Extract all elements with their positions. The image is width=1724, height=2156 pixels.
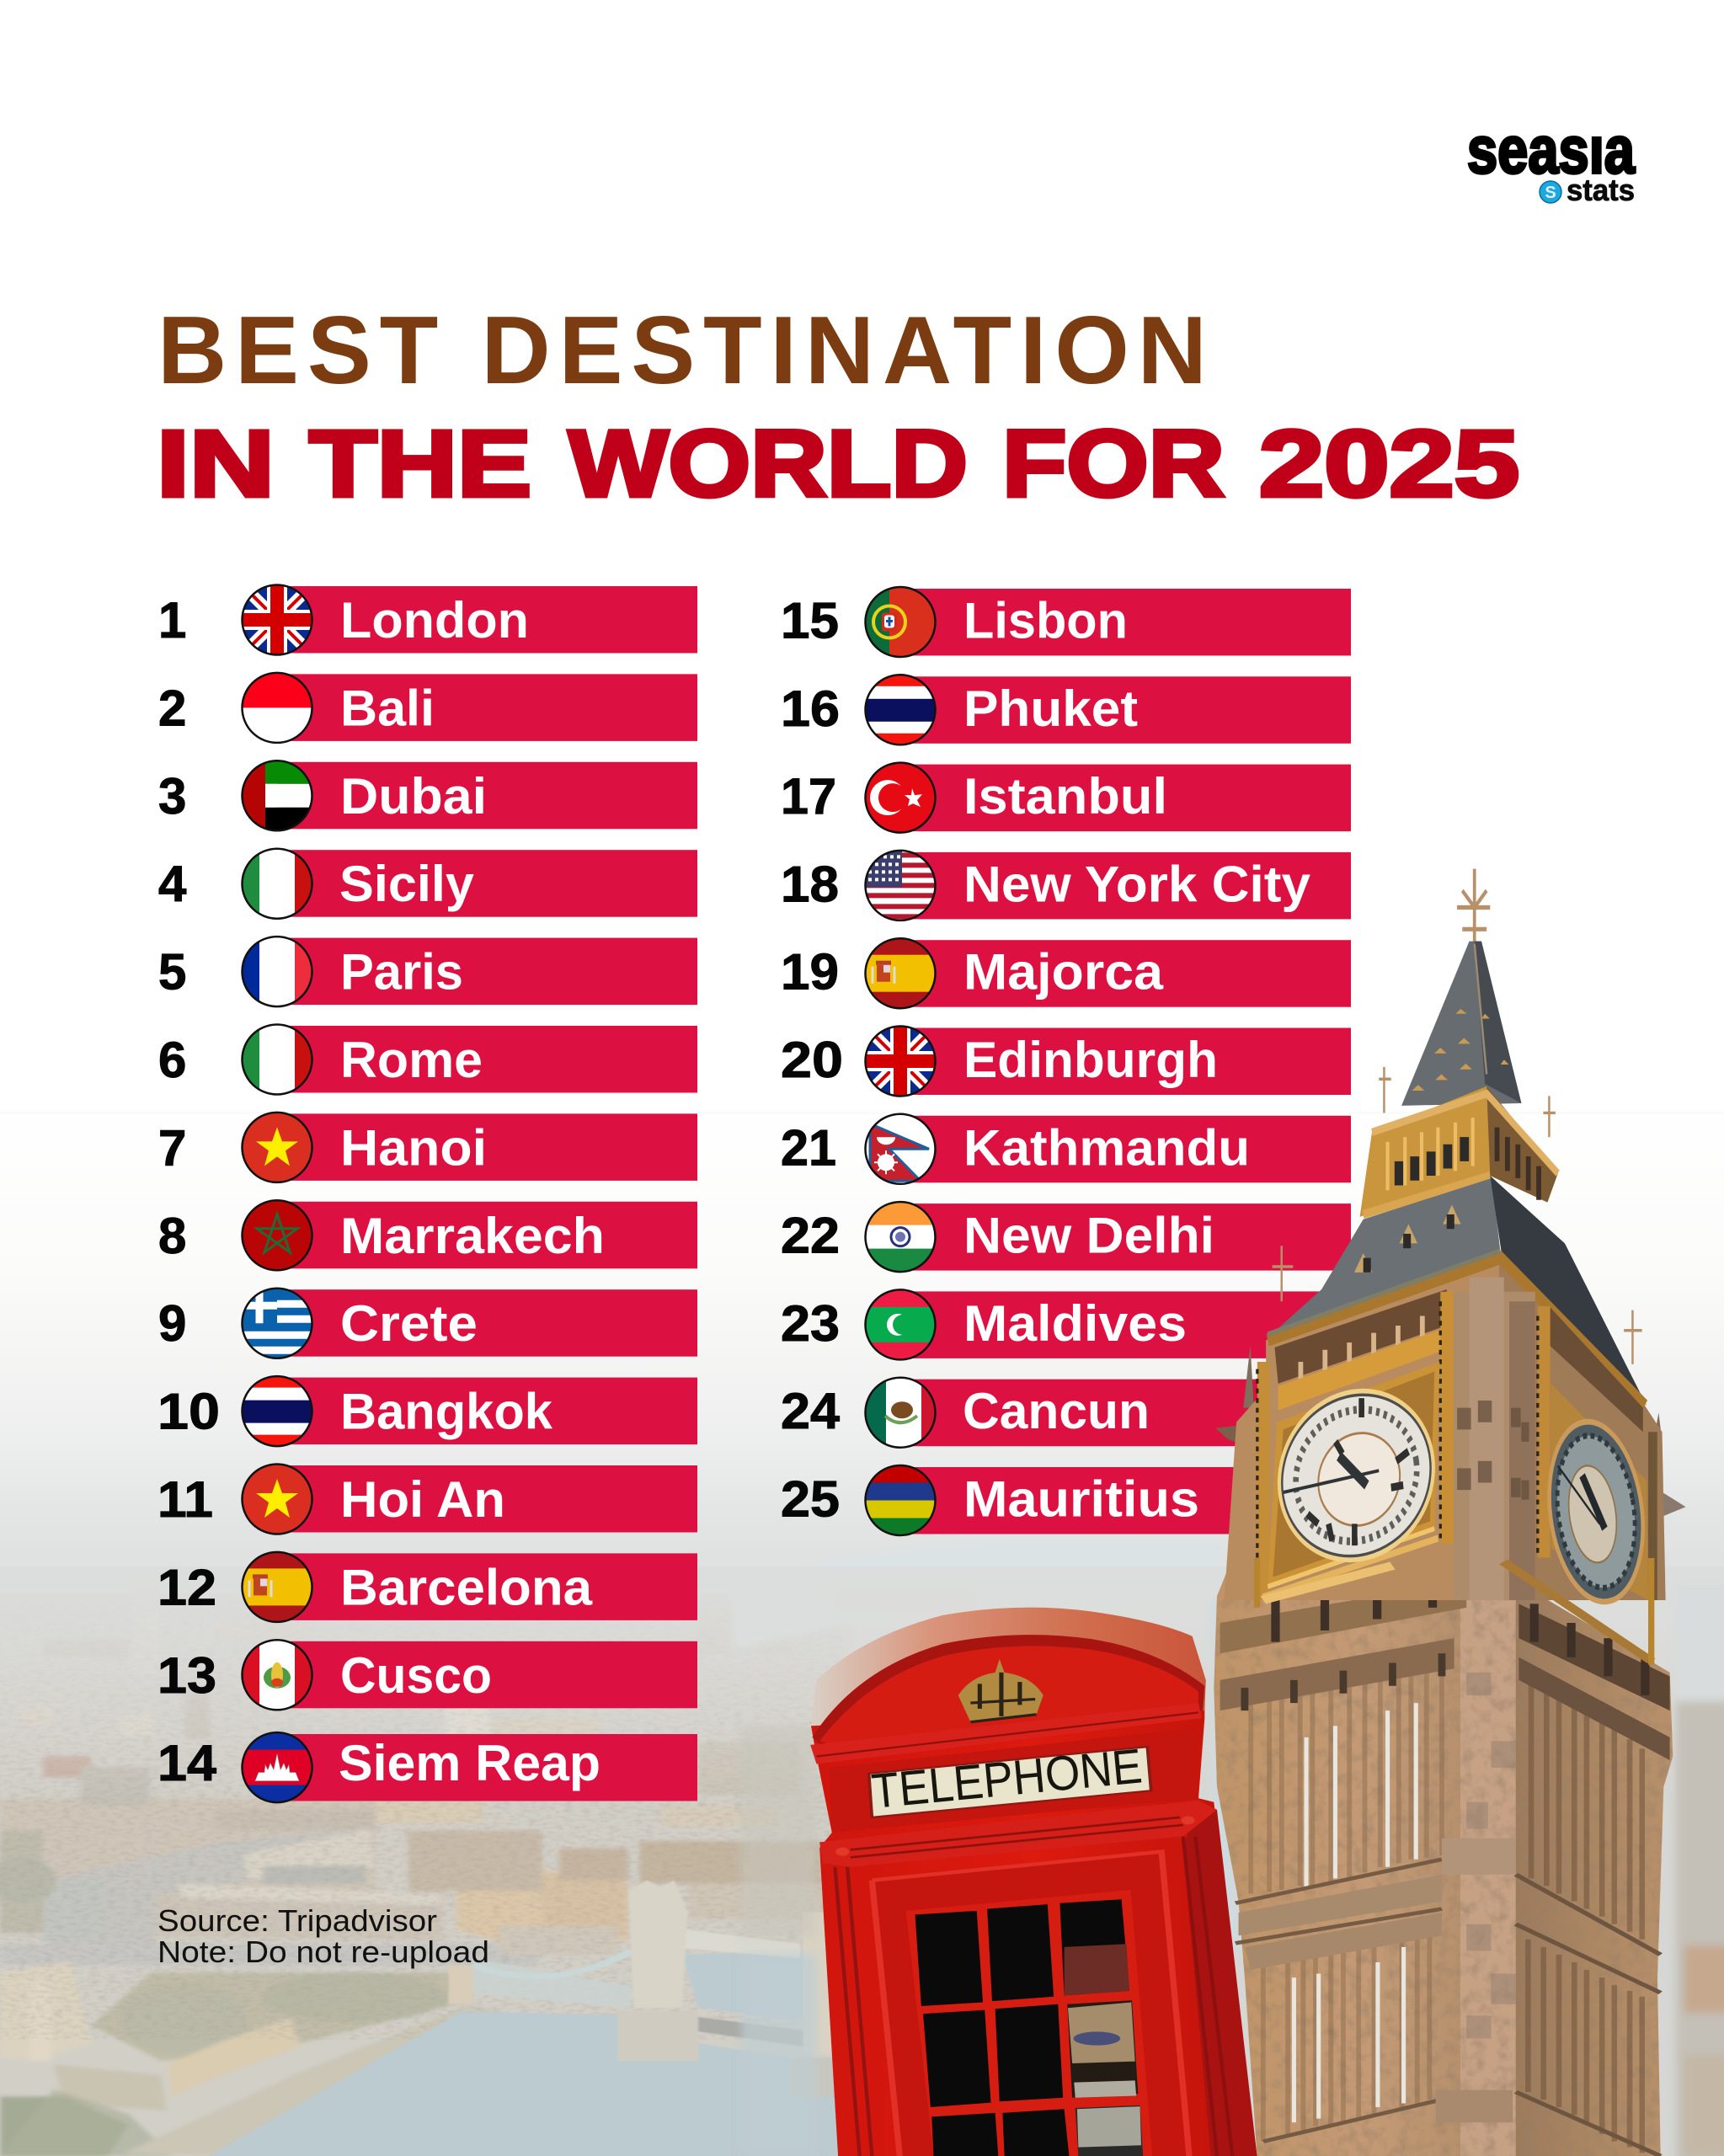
left clock: [1268, 1372, 1445, 1579]
distant river, upper area: [733, 1541, 1221, 1651]
title: BEST DESTINATION: [157, 297, 1207, 404]
row 23 Maldives: 23: [781, 1295, 840, 1352]
row 13 Cusco: Cusco: [340, 1647, 492, 1704]
row 12 Barcelona: Barcelona: [340, 1559, 593, 1615]
entablature: [819, 1801, 1217, 1867]
row 5 Paris: [158, 937, 697, 1007]
logo: seasia stats: [1467, 101, 1636, 207]
row 21 Kathmandu: 21: [781, 1119, 836, 1176]
row 18 New York City: 18: [781, 856, 839, 912]
right clock: [1534, 1404, 1658, 1619]
row 24 Cancun: 24: [781, 1383, 841, 1439]
sign housing: [829, 1727, 1197, 1833]
row 17 Istanbul: 17: [781, 768, 836, 825]
row 4 Sicily: Sicily: [339, 856, 475, 912]
row 25 Mauritius: 25: [781, 1470, 840, 1528]
row 2 Bali: Bali: [340, 680, 435, 736]
row 14 Siem Reap: [157, 1732, 697, 1803]
row 18 New York City: [781, 850, 1351, 921]
logo: seasia stats: seasia: [1467, 112, 1636, 187]
row 10 Bangkok: 10: [157, 1384, 220, 1440]
title line two: [157, 411, 1519, 516]
row 1 London: London: [340, 592, 529, 648]
row 17 Istanbul: [781, 762, 1351, 833]
row 2 Bali: [158, 672, 697, 743]
row 14 Siem Reap: 14: [157, 1735, 217, 1791]
cornice: [810, 1703, 1202, 1764]
row 17 Istanbul: Istanbul: [963, 768, 1167, 825]
row 5 Paris: 5: [158, 944, 186, 1001]
row 19 Majorca: [781, 938, 1351, 1009]
row 2 Bali: 2: [158, 680, 186, 736]
clock hands: [1284, 1470, 1379, 1492]
row 6 Rome: [158, 1024, 697, 1095]
dome roof: [810, 1608, 1206, 1726]
left clock frame: [1268, 1362, 1439, 1587]
row 16 Phuket: [781, 675, 1351, 745]
title line two: THE: [309, 411, 531, 516]
row 3 Dubai: Dubai: [340, 768, 487, 825]
row 15 Lisbon: Lisbon: [963, 593, 1128, 648]
row 7 Hanoi: 7: [158, 1119, 186, 1176]
row 13 Cusco: 13: [157, 1647, 216, 1704]
body: [810, 1680, 1257, 2156]
row 24 Cancun: Cancun: [963, 1383, 1150, 1439]
row 20 Edinburgh: 20: [781, 1032, 843, 1088]
row 3 Dubai: 3: [158, 768, 186, 825]
row 22 New Delhi: New Delhi: [963, 1208, 1214, 1264]
source note: Note: Do not re-upload: [157, 1935, 489, 1969]
title line two: IN: [157, 411, 275, 516]
row 22 New Delhi: [781, 1202, 1351, 1273]
row 1 London: [158, 584, 697, 655]
row 16 Phuket: 16: [781, 680, 840, 737]
row 12 Barcelona: 12: [157, 1559, 216, 1615]
right arcade: [1549, 1306, 1643, 1432]
pinnacle and gargoyles: [1243, 1345, 1663, 1442]
source note: Source: Tripadvisor: [157, 1903, 437, 1938]
left face: [1225, 1253, 1501, 1600]
row 20 Edinburgh: [781, 1026, 1351, 1097]
row 10 Bangkok: [157, 1376, 697, 1447]
icon: blue globe: [1540, 181, 1561, 203]
row 21 Kathmandu: [781, 1113, 1351, 1184]
TELEPHONE sign text: TELEPHONE: [869, 1738, 1145, 1819]
row 25 Mauritius: Mauritius: [963, 1470, 1199, 1528]
row 21 Kathmandu: Kathmandu: [963, 1119, 1250, 1176]
row 16 Phuket: Phuket: [963, 680, 1138, 737]
arcade band: [1274, 1289, 1447, 1384]
ranking column 2: [781, 586, 1351, 1536]
row 9 Crete: [158, 1288, 697, 1358]
lower roof: [1268, 1178, 1501, 1337]
row 14 Siem Reap: Siem Reap: [339, 1735, 600, 1791]
row 15 Lisbon: 15: [781, 593, 839, 648]
corner column: [1454, 1292, 1535, 1600]
illustration: Big Ben lower shaft: [1214, 1558, 1673, 2156]
row 19 Majorca: Majorca: [963, 944, 1164, 1001]
row 3 Dubai: [158, 760, 697, 831]
row 6 Rome: Rome: [340, 1032, 483, 1088]
row 7 Hanoi: Hanoi: [340, 1119, 487, 1176]
row 23 Maldives: Maldives: [963, 1295, 1187, 1352]
row 1 London: 1: [158, 592, 186, 648]
row 24 Cancun: [781, 1377, 1351, 1448]
row 6 Rome: 6: [158, 1032, 186, 1088]
logo: seasia stats: stats: [1567, 173, 1635, 207]
row 13 Cusco: [157, 1640, 697, 1710]
row 22 New Delhi: 22: [781, 1208, 840, 1264]
ranking column 1: [157, 584, 697, 1803]
inner arch: [812, 1635, 1204, 1748]
crown emblem: [958, 1659, 1043, 1722]
illustration: Big Ben clock stage and spire: [1215, 869, 1686, 1619]
illustration: Big Ben base of clock stage: [1257, 1558, 1652, 1665]
row 20 Edinburgh: Edinburgh: [963, 1032, 1218, 1088]
right clock frame: [1551, 1384, 1648, 1600]
row 7 Hanoi: [158, 1112, 697, 1182]
gold columns: [1440, 1292, 1454, 1543]
row 8 Marrakech: [158, 1200, 697, 1271]
row 9 Crete: Crete: [340, 1295, 478, 1352]
window panes: [906, 1890, 1152, 2156]
title line two: WORLD: [568, 411, 968, 516]
row 8 Marrakech: Marrakech: [340, 1208, 605, 1264]
clock hands: [1583, 1476, 1604, 1529]
row 8 Marrakech: 8: [158, 1208, 186, 1264]
row 11 Hoi An: Hoi An: [340, 1471, 505, 1528]
right face: [1499, 1253, 1666, 1600]
row 18 New York City: New York City: [963, 856, 1311, 912]
row 9 Crete: 9: [158, 1295, 186, 1352]
row 23 Maldives: [781, 1289, 1351, 1360]
title line two: 2025: [1259, 411, 1519, 516]
row 4 Sicily: [158, 848, 697, 919]
row 15 Lisbon: [781, 586, 1351, 657]
source note: [157, 1903, 489, 1969]
city texture: [0, 1600, 842, 2040]
row 4 Sicily: 4: [158, 856, 187, 912]
row 11 Hoi An: [157, 1464, 697, 1534]
title: [157, 297, 1519, 516]
illustration: red telephone box: [810, 1608, 1257, 2156]
finial: [1273, 869, 1642, 1364]
row 25 Mauritius: [781, 1465, 1351, 1536]
row 10 Bangkok: Bangkok: [340, 1384, 553, 1440]
sign plate: [869, 1747, 1151, 1817]
row 19 Majorca: 19: [781, 944, 839, 1001]
row 5 Paris: Paris: [340, 944, 463, 1001]
spire: [1401, 942, 1521, 1106]
row 11 Hoi An: 11: [157, 1471, 213, 1528]
belfry: [1360, 1086, 1558, 1217]
door frame: [869, 1849, 1186, 2156]
crown band: [1268, 1258, 1645, 1406]
icon: blue globe: S: [1545, 184, 1556, 202]
row 12 Barcelona: [157, 1551, 697, 1622]
title line two: FOR: [1002, 411, 1225, 516]
